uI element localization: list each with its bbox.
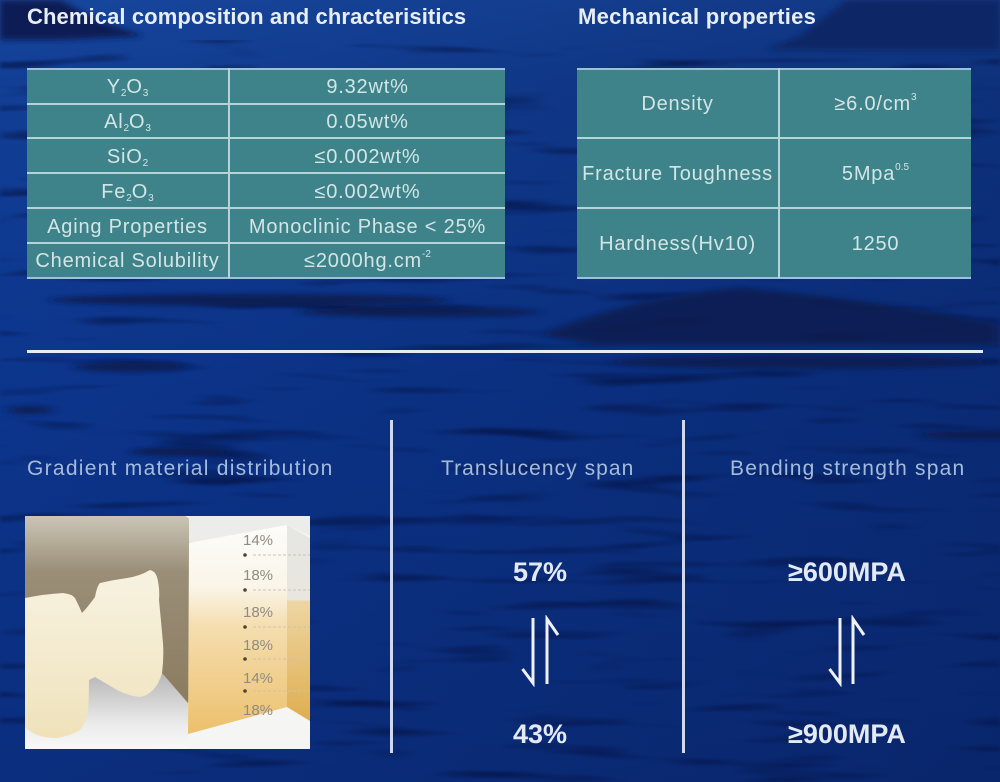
back wall bbox=[25, 516, 193, 703]
heading: bending strength span: Bending strength span bbox=[730, 457, 965, 480]
table: chemical composition: Fe2O3 bbox=[101, 180, 154, 204]
table: chemical composition: Monoclinic Phase < 25% bbox=[249, 216, 486, 238]
table: mechanical properties bbox=[577, 68, 971, 279]
vertical divider right bbox=[682, 420, 685, 753]
percentage labels: 18% bbox=[243, 604, 273, 621]
heading: translucency span: Translucency span bbox=[441, 457, 634, 480]
heading: mechanical properties: Mechanical properties bbox=[578, 4, 816, 29]
table: chemical composition: SiO2 bbox=[107, 146, 148, 168]
icon: reversible arrows translucency bbox=[521, 615, 560, 687]
table: chemical composition: Aging Properties bbox=[47, 216, 208, 238]
top panel strip bbox=[189, 516, 310, 543]
floor bbox=[25, 671, 188, 749]
heading: chemical composition: Chemical composition and chracterisitics bbox=[27, 4, 466, 29]
gradient panel bbox=[188, 525, 287, 734]
table: mechanical properties: Density bbox=[641, 93, 714, 115]
side panel bbox=[287, 525, 310, 721]
table: chemical composition: ≤0.002wt% bbox=[314, 146, 420, 168]
heading: gradient material distribution: Gradient material distribution bbox=[27, 457, 334, 480]
table: chemical composition: Chemical Solubility bbox=[35, 250, 220, 272]
table: chemical composition bbox=[27, 68, 505, 279]
percentage labels: 18% bbox=[243, 567, 273, 584]
table: chemical composition: Al2O3 bbox=[104, 110, 151, 134]
table: chemical composition: 0.05wt% bbox=[326, 110, 409, 132]
table: chemical composition: Y2O3 bbox=[107, 76, 148, 98]
image: tooth gradient illustration bbox=[25, 516, 310, 749]
table: mechanical properties: Hardness(Hv10) bbox=[599, 233, 756, 255]
image frame bbox=[25, 516, 310, 749]
percentage labels: 14% bbox=[243, 670, 273, 687]
teeth bbox=[25, 570, 163, 738]
value: 900MPA: ≥900MPA bbox=[788, 719, 906, 749]
value: 43%: 43% bbox=[513, 719, 567, 749]
table: chemical composition: ≤2000hg.cm-2 bbox=[304, 249, 431, 272]
marker dots bbox=[243, 553, 247, 693]
table: chemical composition: 9.32wt% bbox=[326, 76, 409, 98]
table: mechanical properties: ≥6.0/cm3 bbox=[834, 92, 917, 115]
icon: reversible arrows strength bbox=[828, 615, 866, 687]
table: chemical composition: ≤0.002wt% bbox=[314, 180, 420, 202]
value: 57%: 57% bbox=[513, 557, 567, 587]
percentage labels: 14% bbox=[243, 532, 273, 549]
table: mechanical properties: 5Mpa0.5 bbox=[842, 162, 909, 185]
percentage labels: 18% bbox=[243, 702, 273, 719]
value: 600MPA: ≥600MPA bbox=[788, 557, 906, 587]
percentage labels: 18% bbox=[243, 637, 273, 654]
percentage labels bbox=[243, 532, 273, 719]
table: mechanical properties: 1250 bbox=[852, 233, 899, 255]
horizontal divider bbox=[27, 350, 983, 353]
vertical divider left bbox=[390, 420, 393, 753]
table: mechanical properties: Fracture Toughness bbox=[582, 163, 773, 185]
